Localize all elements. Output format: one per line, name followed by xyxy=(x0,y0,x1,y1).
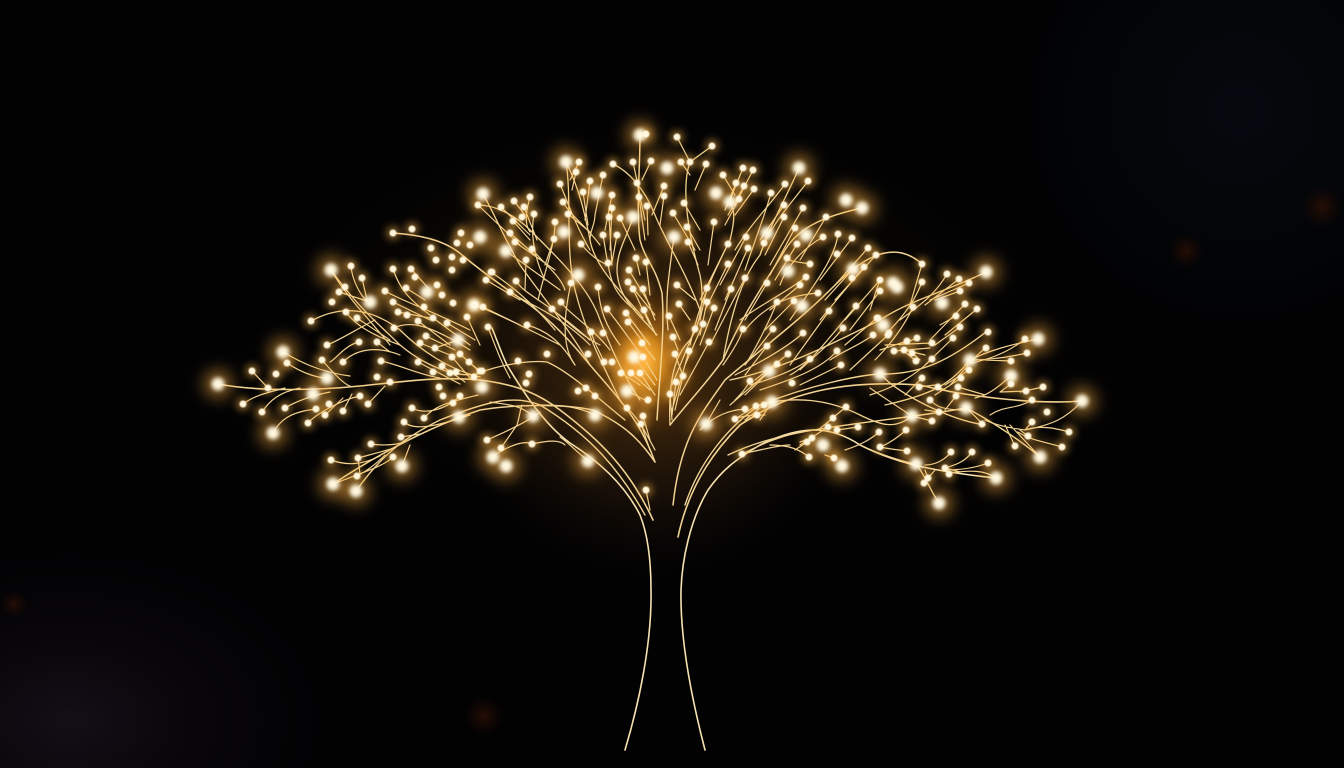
light nodes xyxy=(218,134,1082,503)
canopy haze xyxy=(270,115,1030,515)
bright node cores xyxy=(218,135,1082,503)
halo of all nodes xyxy=(243,134,1069,490)
top-right twigs xyxy=(669,137,754,420)
central glow xyxy=(440,160,860,580)
left twigs xyxy=(243,352,385,433)
left limbs xyxy=(218,379,653,520)
top-left twigs xyxy=(475,197,610,365)
small node cores xyxy=(243,134,1069,490)
tree trunk xyxy=(492,328,996,750)
wide glow of bright nodes xyxy=(218,135,1082,503)
central limbs xyxy=(638,135,663,420)
right limbs xyxy=(670,208,862,425)
tree branches xyxy=(218,135,1082,537)
